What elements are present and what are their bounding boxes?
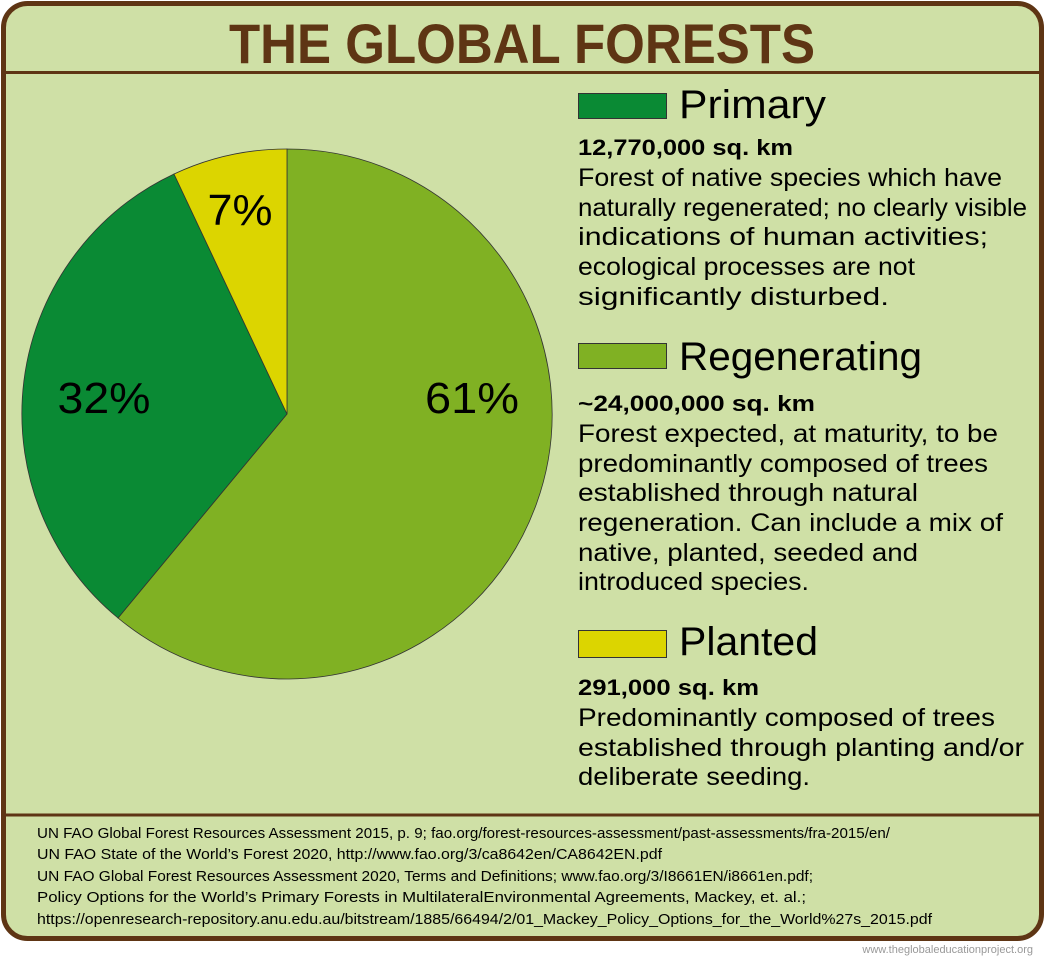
legend: regenerating: established through natural (578, 479, 918, 507)
slice: planted 7% (174, 149, 287, 414)
legend: planted (578, 620, 1024, 791)
legend: regenerating: Regenerating (679, 335, 922, 379)
legend: planted: established through planting and/or (578, 734, 1024, 762)
footer: sources: Policy Options for the World’s Primary Forests in MultilateralEnvironmental Agreements, Mackey, et. al.; (37, 889, 806, 906)
legend: primary (578, 83, 1027, 311)
legend: planted: Predominantly composed of trees (578, 704, 995, 732)
legend: regenerating: regeneration. Can include a mix of (578, 509, 1003, 537)
legend: regenerating: native, planted, seeded and (578, 539, 918, 567)
legend: planted: Planted (679, 620, 818, 664)
slice: primary 32% (22, 174, 287, 618)
label 7%: 7% (208, 186, 272, 235)
legend: regenerating: ~24,000,000 sq. km (578, 391, 815, 416)
legend: primary: naturally regenerated; no clearly visible (578, 194, 1027, 222)
legend: primary: significantly disturbed. (578, 283, 889, 311)
legend: regenerating: Forest expected, at maturity, to be (578, 420, 998, 448)
watermark: www.theglobaleducationproject.org (861, 944, 1033, 956)
footer: sources: UN FAO Global Forest Resources Assessment 2020, Terms and Definitions; www.fao.org/3/I8661EN/i8661en.pdf; (37, 868, 813, 885)
legend: primary: Primary (679, 83, 826, 127)
legend: primary: Forest of native species which have (578, 164, 1002, 192)
footer: sources: UN FAO State of the World’s Forest 2020, http://www.fao.org/3/ca8642en/CA8642EN.pdf (37, 846, 663, 863)
footer: sources: UN FAO Global Forest Resources Assessment 2015, p. 9; fao.org/forest-resources-assessment/past-assessments/fra-2015/en/ (37, 825, 891, 842)
title: THE GLOBAL FORESTS (229, 12, 815, 75)
label 32%: 32% (58, 374, 150, 423)
legend: planted: deliberate seeding. (578, 763, 810, 791)
legend: regenerating: predominantly composed of trees (578, 450, 988, 478)
legend: regenerating (578, 335, 1003, 596)
legend: planted: 291,000 sq. km (578, 675, 759, 700)
pie chart (22, 149, 552, 679)
legend: primary: 12,770,000 sq. km (578, 135, 793, 160)
legend: primary: ecological processes are not (578, 253, 915, 281)
legend: regenerating: introduced species. (578, 568, 809, 596)
legend: primary: indications of human activities; (578, 223, 988, 251)
footer: sources: https://openresearch-repository.anu.edu.au/bitstream/1885/66494/2/01_Mackey_Policy_Options_for_the_World%27s_2015.pdf (37, 911, 933, 928)
slice: regenerating 61% (118, 149, 552, 679)
footer: sources (37, 825, 933, 928)
label 61%: 61% (425, 374, 519, 423)
